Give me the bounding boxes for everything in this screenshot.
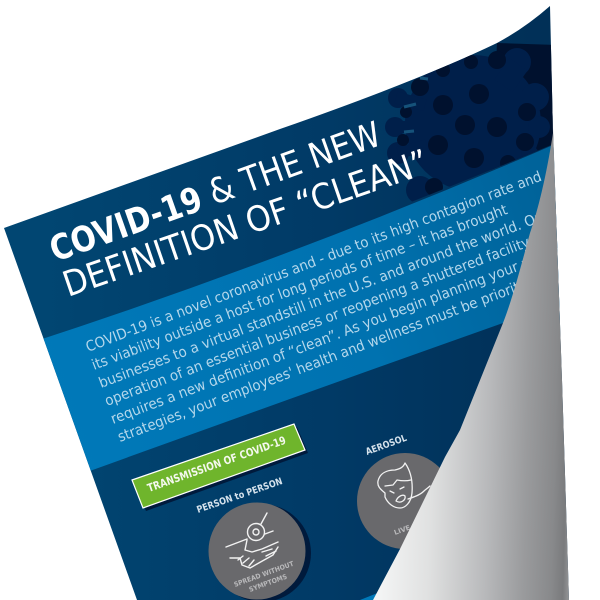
page curl xyxy=(373,100,569,600)
intro text block: operation of an essential business or reopening a shuttered facility xyxy=(103,235,533,410)
panel: aerosol xyxy=(357,434,440,549)
intro text block: its viability outside a host for long periods of time – it has brought xyxy=(90,202,510,374)
callout: transmission of covid-19 label: TRANSMISSION OF COVID-19 xyxy=(146,434,288,495)
icon: coronavirus xyxy=(385,43,556,204)
text: spread without symptoms: SPREAD WITHOUT xyxy=(233,560,295,589)
intro text block: requires a new definition of “clean”. As you begin planning your return xyxy=(109,243,563,428)
intro text block: businesses to a virtual standstill in the U.S. and around the world. Once xyxy=(97,204,561,392)
panel: intro band xyxy=(30,142,560,472)
icon: coughing face xyxy=(378,463,430,508)
icon: handshake and magnifier xyxy=(226,513,278,568)
panel: person to person: PERSON to PERSON xyxy=(195,476,284,516)
intro text block: strategies, your employees' health and wellness must be prioritized. xyxy=(116,268,552,446)
panel: aerosol: AEROSOL xyxy=(364,433,408,458)
title: DEFINITION OF “CLEAN” xyxy=(58,143,434,306)
bottom blue strip xyxy=(360,594,376,600)
text: live: LIVE xyxy=(393,524,412,537)
text: spread without symptoms: SYMPTOMS xyxy=(248,573,288,594)
title: COVID-19 xyxy=(45,180,208,270)
intro text block: COVID-19 is a novel coronavirus and - due to its high contagion rate and xyxy=(84,169,544,356)
intro text block xyxy=(84,169,563,446)
title: & THE NEW xyxy=(203,115,386,213)
panel: person to person xyxy=(195,476,311,600)
